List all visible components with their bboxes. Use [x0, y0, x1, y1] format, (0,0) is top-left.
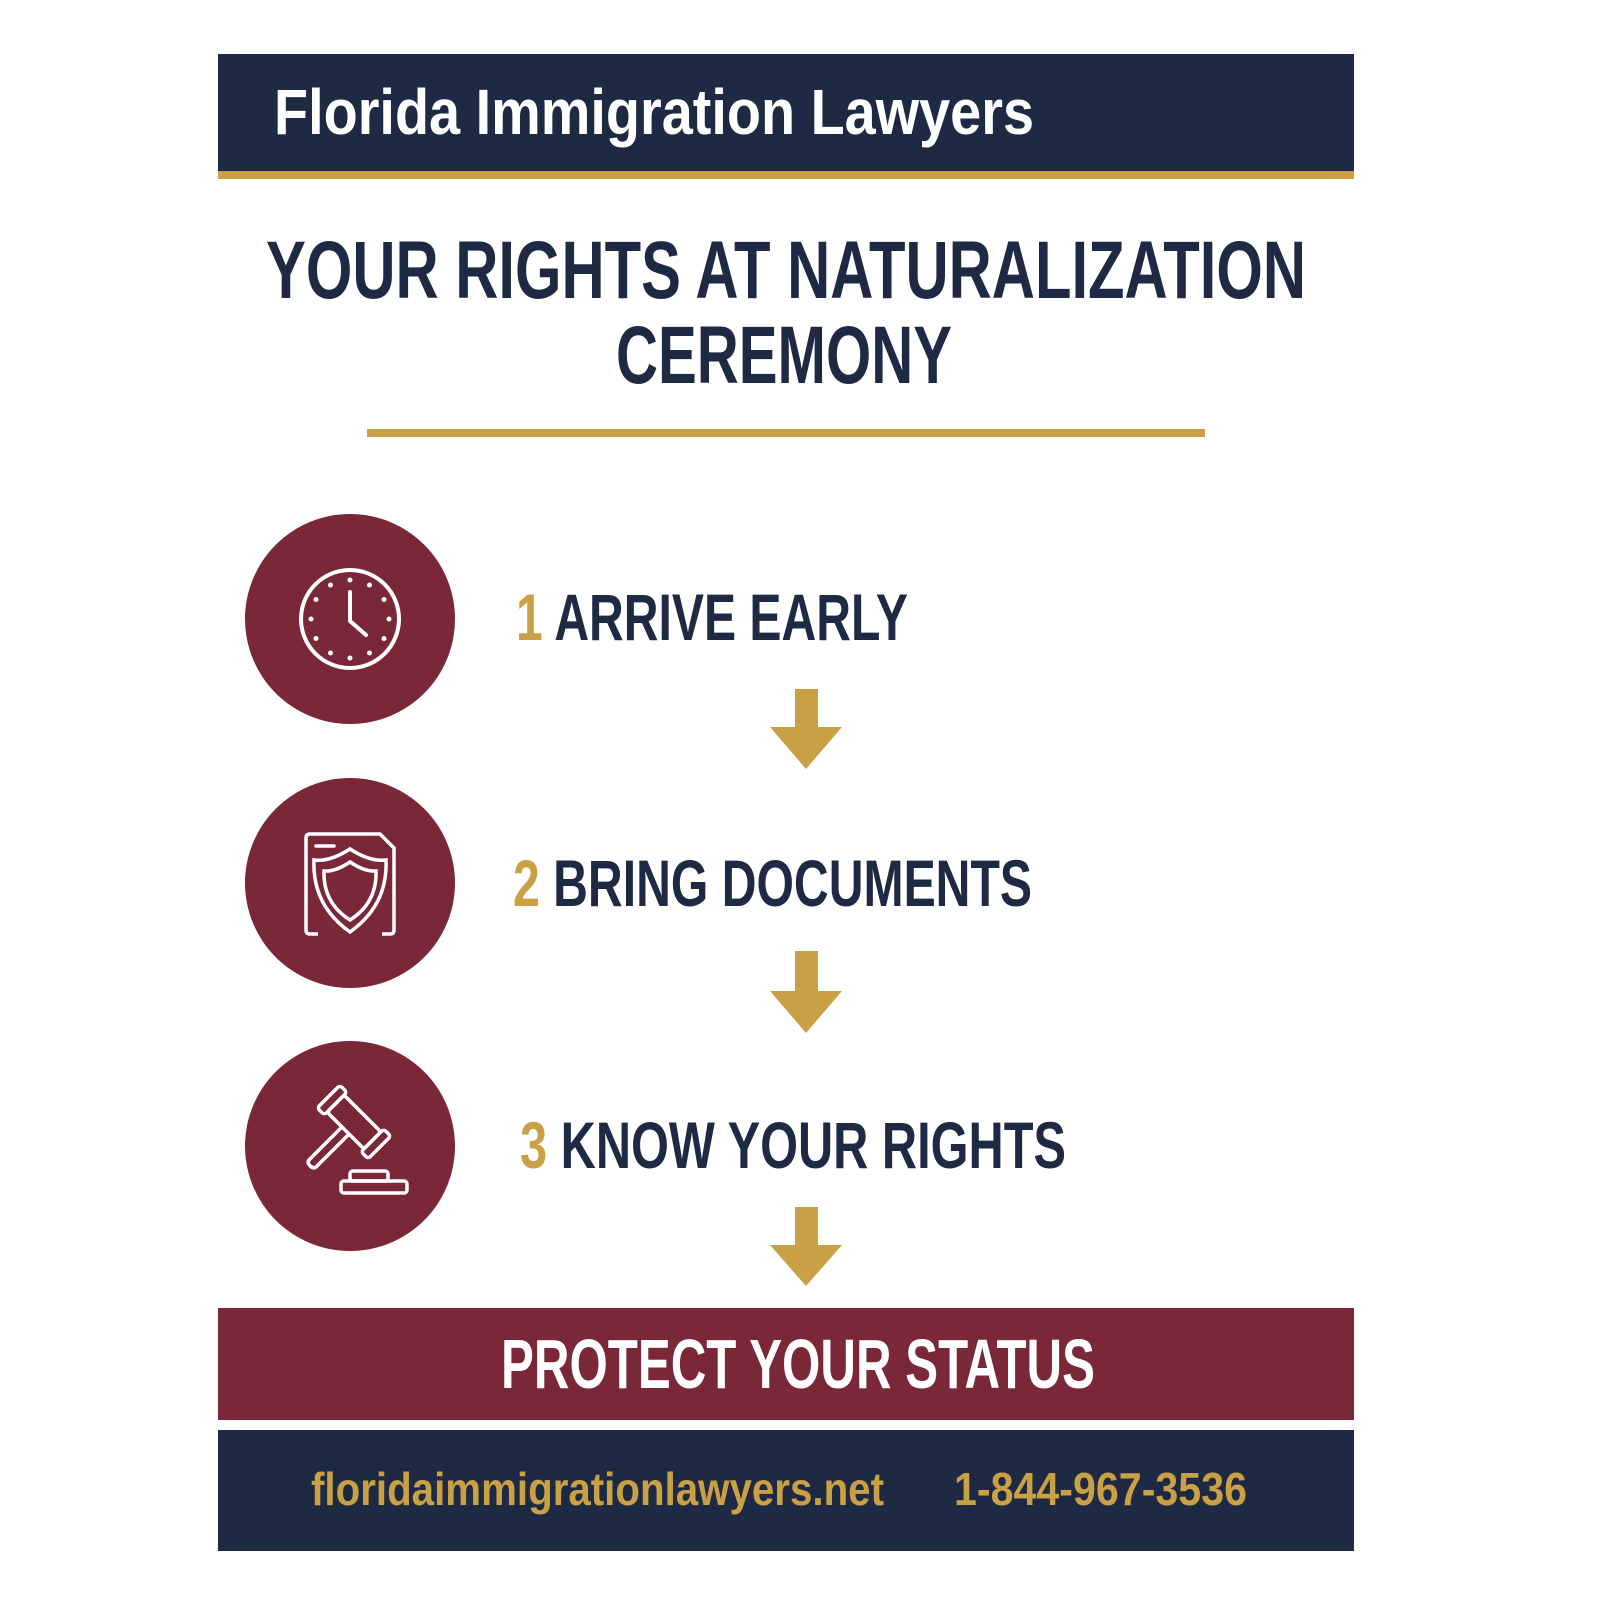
arrow 2 [770, 951, 842, 1033]
title [266, 225, 1306, 401]
footer contact bar: floridaimmigrationlawyers.net [311, 1463, 884, 1515]
icon: document with shield [245, 778, 455, 988]
step 2 text: 2 BRING DOCUMENTS [513, 846, 1032, 920]
title underline [367, 429, 1205, 437]
footer contact bar [218, 1430, 1354, 1551]
header bar: Florida Immigration Lawyers [274, 76, 1034, 148]
header bar [218, 54, 1354, 179]
banner: protect your status: PROTECT YOUR STATUS [501, 1325, 1095, 1403]
banner: protect your status [218, 1308, 1354, 1420]
icon: clock [245, 514, 455, 724]
icon: gavel [245, 1041, 455, 1251]
arrow 3 [770, 1207, 842, 1286]
step 1 text: 1 ARRIVE EARLY [516, 580, 908, 654]
title: CEREMONY [616, 310, 952, 401]
step 3 text: 3 KNOW YOUR RIGHTS [520, 1108, 1066, 1182]
arrow 1 [770, 689, 842, 769]
footer contact bar: 1-844-967-3536 [954, 1463, 1247, 1515]
